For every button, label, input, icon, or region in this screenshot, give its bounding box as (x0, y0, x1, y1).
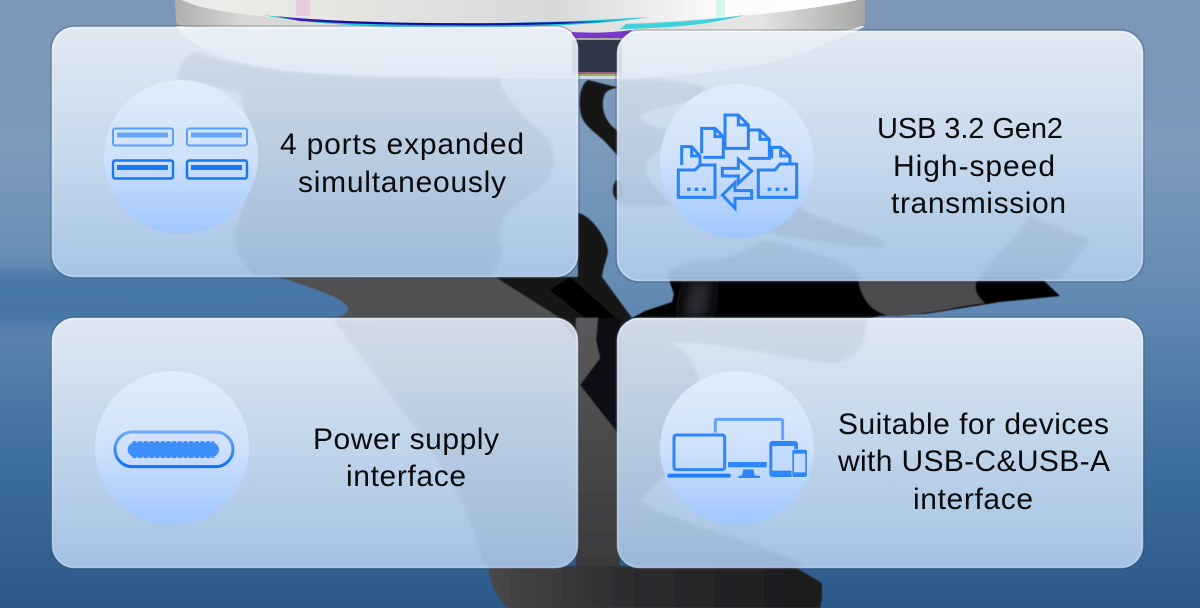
circle badge (104, 80, 258, 234)
icon: folders and transfer arrows (678, 115, 797, 208)
faint body shadows seen through the card (618, 319, 867, 567)
icon: USB-C port (115, 432, 233, 467)
text: Power supply interface: interface (346, 460, 466, 493)
grey foot block (858, 277, 985, 316)
text: Suitable for devices with USB-C&USB-A interface: with USB-C&USB-A (837, 445, 1110, 478)
text: USB 3.2 Gen2 High-speed transmission: transmission (891, 187, 1066, 220)
product: hub body silhouette (278, 80, 1060, 608)
dome white disc (182, 0, 858, 25)
bottom foot under lower cards (488, 566, 822, 608)
dome iridescent ring (262, 0, 745, 29)
black cable hook (580, 80, 620, 158)
faint swirl shadows seen through the card (618, 79, 1090, 280)
circle badge (95, 371, 249, 525)
product: lens dome top (175, 0, 865, 79)
grey lower column (576, 318, 620, 568)
faint body shadow seen through the card (178, 52, 554, 276)
grey body between left cards (278, 277, 590, 318)
faint body shadow seen through the card (333, 319, 577, 567)
circle badge (660, 371, 814, 525)
panel: 4 ports (51, 26, 579, 278)
upper black neck (578, 213, 608, 277)
background: darker water band left of the hub (0, 270, 360, 325)
text: Suitable for devices with USB-C&USB-A interface (837, 408, 1110, 516)
lit smear in black band (682, 281, 712, 318)
port recess (550, 277, 615, 332)
black band between right cards (632, 277, 1060, 318)
icon: four USB-A ports (113, 128, 247, 178)
text: 4 ports expanded simultaneously (280, 128, 524, 199)
neck and rainbow stripes between top cards (572, 30, 632, 79)
black wedge by the port (495, 277, 632, 345)
text: 4 ports expanded simultaneously: simultaneously (298, 166, 506, 199)
black core in lower column (580, 318, 620, 436)
text: 4 ports expanded simultaneously: 4 ports expanded (280, 128, 524, 161)
text: USB 3.2 Gen2 High-speed transmission (877, 113, 1066, 220)
text: Power supply interface: Power supply (313, 423, 499, 456)
panel: USB 3.2 Gen2 (616, 30, 1144, 282)
text: USB 3.2 Gen2 High-speed transmission: USB 3.2 Gen2 (877, 113, 1063, 145)
text: Power supply interface (313, 423, 499, 493)
text: Suitable for devices with USB-C&USB-A interface: interface (913, 483, 1033, 516)
panel: power supply (51, 317, 579, 569)
icon: laptop, monitor, tablet, phone (667, 419, 807, 478)
panel: compatible devices (616, 317, 1144, 569)
text: USB 3.2 Gen2 High-speed transmission: High-speed (893, 150, 1055, 183)
circle badge (660, 84, 814, 238)
text: Suitable for devices with USB-C&USB-A interface: Suitable for devices (838, 408, 1109, 441)
dome silver rim (175, 0, 865, 33)
dome lower part (176, 26, 865, 79)
